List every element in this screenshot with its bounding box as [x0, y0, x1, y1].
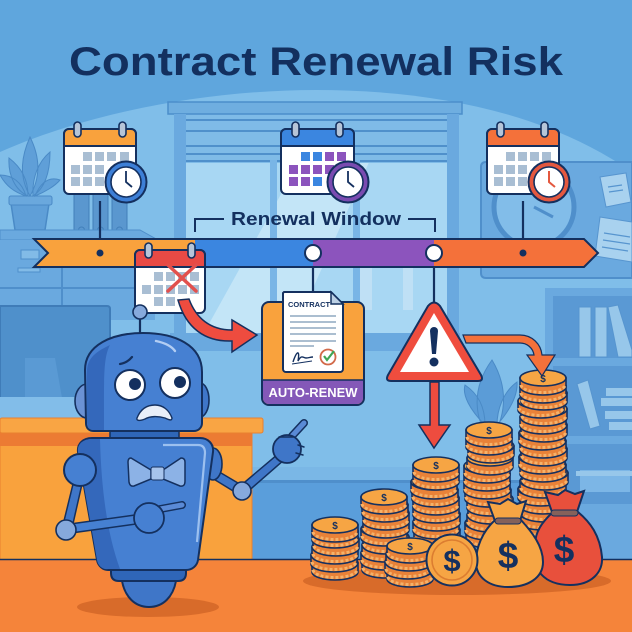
- robot antenna: [133, 305, 147, 334]
- window with blinds: [168, 102, 462, 351]
- coin stack: second tallest: [464, 422, 514, 548]
- coin stack: second tallest: $: [486, 426, 492, 437]
- red arrow down from warning: [419, 382, 450, 448]
- money bag: red: $: [554, 529, 575, 570]
- coin stack: tallest: $: [540, 374, 546, 385]
- robot head highlight: [156, 341, 175, 351]
- warning triangle: [387, 302, 482, 381]
- robot body: [78, 438, 213, 570]
- calendar icon: window, blue and purple: [281, 122, 368, 202]
- renewal window bracket and label: Renewal Window: [231, 209, 402, 229]
- robot bow tie: [128, 458, 185, 486]
- robot eyebrow: [120, 357, 132, 364]
- title: Contract Renewal Risk: [69, 40, 564, 84]
- coin stack: tallest: [518, 370, 568, 538]
- floor: [0, 559, 632, 632]
- robot body shading: [78, 439, 120, 569]
- contract auto-renew card: [262, 292, 364, 405]
- background floor plant: [464, 360, 517, 440]
- robot: [56, 305, 304, 607]
- calendar icon: start, orange: [64, 122, 146, 202]
- orange arrow to tallest coin stack: [463, 335, 555, 376]
- coin stack: front small: $: [407, 542, 413, 553]
- red curved arrow to contract: [178, 299, 257, 352]
- contract auto-renew card: AUTO-RENEW: [268, 386, 358, 400]
- background bookshelf: [545, 288, 632, 563]
- coin stack: left: [311, 517, 359, 580]
- background plant and binders: [0, 137, 158, 244]
- money bag: red: [534, 490, 602, 585]
- robot ears: [75, 383, 209, 418]
- background filing cabinet: [0, 240, 155, 320]
- coin stack: middle: [411, 457, 460, 547]
- robot head: [85, 333, 202, 431]
- timeline bar: [34, 239, 598, 267]
- background wall clock and noticeboard: [481, 162, 632, 278]
- background monitor: [0, 306, 110, 419]
- connector lines: [100, 201, 523, 305]
- coin stack: short back: $: [381, 493, 387, 504]
- contract document: CONTRACT: [288, 300, 330, 309]
- large dollar coin: $: [443, 543, 461, 578]
- large dollar coin: [426, 534, 478, 586]
- coin stack: left: $: [332, 521, 338, 532]
- robot eyes: [115, 368, 190, 400]
- desk: [0, 418, 263, 560]
- money bag: orange: $: [498, 535, 519, 576]
- coin stack: front small: [385, 538, 433, 587]
- robot mouth: [137, 405, 172, 420]
- renewal window bracket and label: [195, 209, 435, 232]
- robot neck: [110, 430, 179, 441]
- money bag: orange: [476, 499, 543, 587]
- robot head shading: [87, 345, 110, 430]
- coin stack: middle: $: [433, 461, 439, 472]
- calendar icon: end, red-orange: [487, 122, 570, 202]
- robot left arm: [56, 454, 182, 540]
- robot right arm: [204, 423, 304, 500]
- robot body highlight: [163, 445, 205, 542]
- coin stack: short back: [361, 489, 409, 578]
- robot base: [111, 569, 186, 607]
- missed date calendar with red X: [135, 243, 205, 313]
